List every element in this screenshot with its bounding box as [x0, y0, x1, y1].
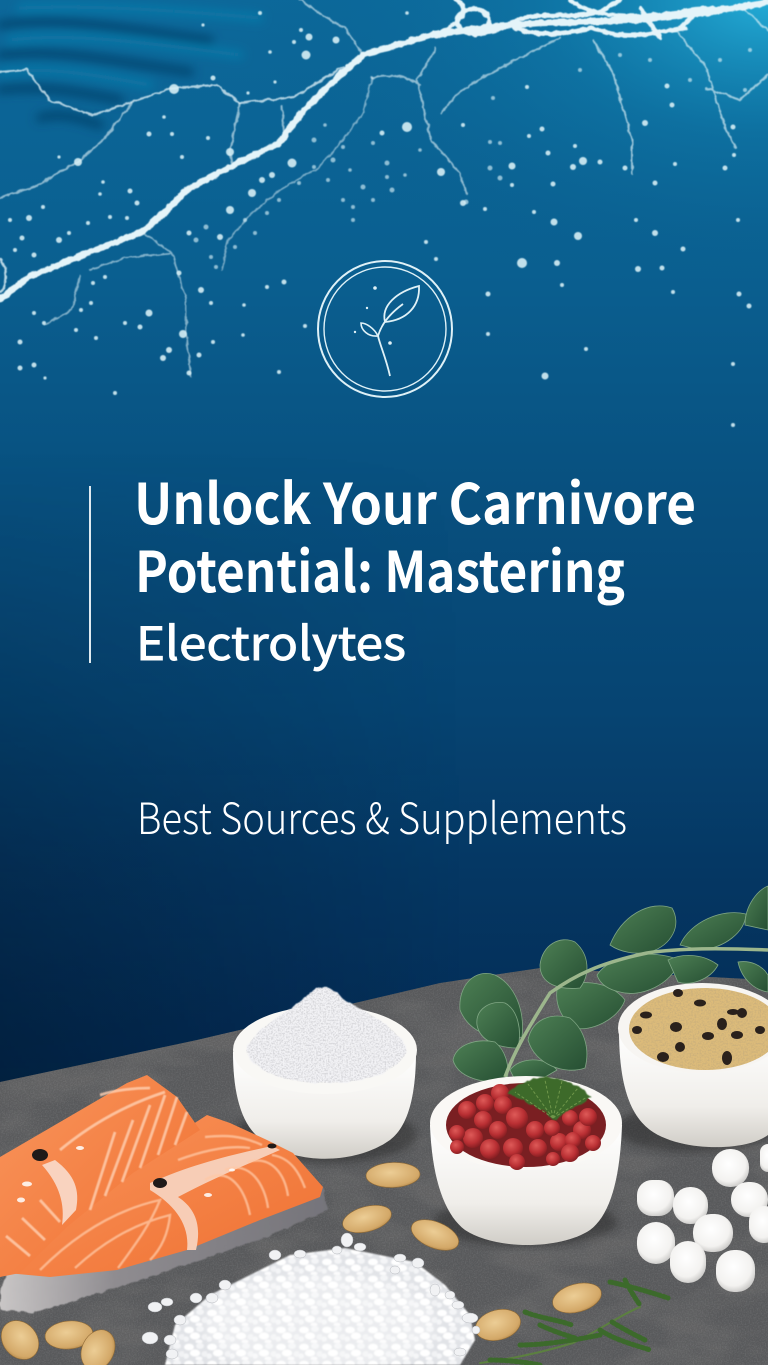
herb branch with leaves [453, 886, 768, 1082]
title: Electrolytes [136, 608, 406, 674]
almonds [0, 1162, 605, 1365]
parsley sprig [480, 1280, 668, 1365]
icon: leaf sprig in double circle [318, 261, 452, 397]
right salmon fillet [0, 1115, 328, 1313]
water splash branching streams [0, 0, 768, 377]
title: Unlock Your Carnivore [134, 460, 696, 541]
subtitle: Best Sources & Supplements [137, 785, 627, 847]
bowl: red berries with herb [430, 1076, 622, 1246]
title [134, 460, 696, 674]
pile of coarse white salt [142, 1233, 480, 1365]
vertical accent line [89, 486, 91, 663]
title: Potential: Mastering [135, 528, 625, 609]
bowl: cookie-like mash with dark seeds [615, 983, 768, 1152]
water droplets [8, 11, 752, 427]
stone table surface [0, 968, 768, 1365]
bowl: white salt powder [233, 987, 417, 1163]
left salmon fillet [0, 1075, 235, 1277]
white supplement tablets [637, 1144, 768, 1292]
salmon fillets [0, 1075, 328, 1313]
background: deep blue water [0, 0, 768, 1082]
